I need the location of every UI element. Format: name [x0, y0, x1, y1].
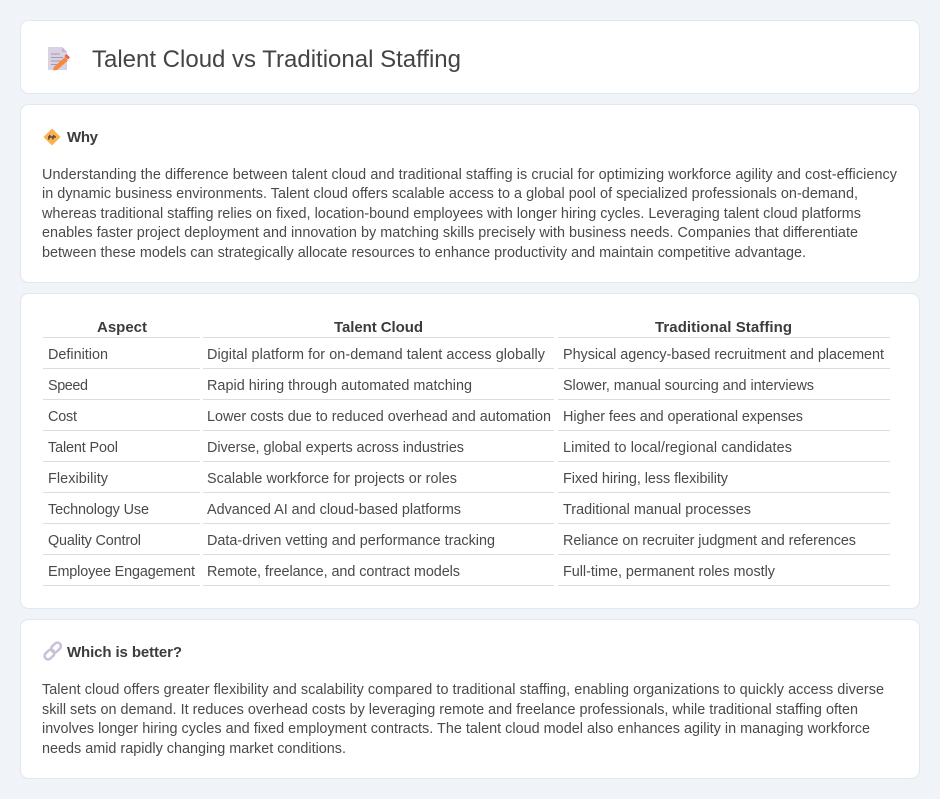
- text block: why paragraph: [41, 167, 898, 261]
- title: Talent Cloud vs Traditional Staffing: [92, 46, 461, 73]
- row: speed: Rapid hiring through automated matching: [207, 378, 472, 394]
- text block: why paragraph: Understanding the difference between talent cloud and traditional staffing is crucial for optimizing workforce agility and cost-efficiency: [42, 167, 898, 183]
- text block: which is better paragraph: needs amid rapidly changing market conditions.: [42, 741, 346, 757]
- text block: why paragraph: in dynamic business environments. Talent cloud offers scalable access to a global pool of specialized professionals on-demand,: [42, 186, 858, 202]
- row: cost: Higher fees and operational expenses: [563, 409, 803, 425]
- row: talent pool: [43, 440, 890, 462]
- text block: why paragraph: whereas traditional staffing relies on fixed, location-bound employees with longer hiring cycles. Leveraging talent cloud platforms: [41, 206, 861, 222]
- table header: Aspect: [97, 319, 147, 336]
- row: quality control: Quality Control: [48, 533, 141, 549]
- row: speed: [43, 378, 890, 400]
- text block: which is better paragraph: involves longer hiring cycles and fixed employment contracts. The talent cloud model also enhances agility in managing workforce: [42, 721, 870, 737]
- row: quality control: Data-driven vetting and performance tracking: [207, 533, 495, 549]
- icon: link: [43, 641, 62, 661]
- row: cost: Cost: [48, 409, 77, 425]
- row: technology use: [43, 502, 890, 524]
- panel: comparison table: [20, 294, 920, 608]
- row: flexibility: Scalable workforce for projects or roles: [207, 471, 457, 487]
- row: definition: Digital platform for on-demand talent access globally: [207, 347, 546, 363]
- row: talent pool: Talent Pool: [48, 440, 118, 456]
- row: talent pool: Diverse, global experts across industries: [207, 440, 464, 456]
- row: definition: Physical agency-based recruitment and placement: [563, 347, 884, 363]
- row: definition: Definition: [48, 347, 108, 363]
- row: employee engagement: Full-time, permanent roles mostly: [563, 564, 776, 580]
- text block: which is better paragraph: Talent cloud offers greater flexibility and scalability compared to traditional staffing, enabling organizations to quickly access diverse: [42, 682, 884, 698]
- panel: which is better: [20, 620, 920, 778]
- row: speed: Slower, manual sourcing and interviews: [563, 378, 814, 394]
- text block: why paragraph: enables faster project deployment and innovation by matching skills precisely with business needs. Companies that differentiate: [42, 225, 858, 241]
- table header: [43, 319, 890, 338]
- heading: why: Why: [67, 129, 99, 146]
- row: speed: Speed: [48, 378, 88, 394]
- text block: why paragraph: between these models can strategically allocate resources to enhance productivity and maintain competitive advantage.: [42, 245, 806, 261]
- row: cost: Lower costs due to reduced overhead and automation: [207, 409, 551, 425]
- table header: Talent Cloud: [334, 319, 423, 336]
- row: flexibility: [43, 471, 890, 492]
- row: employee engagement: Remote, freelance, and contract models: [207, 564, 460, 580]
- text block: which is better paragraph: skill sets on demand. It reduces overhead costs by leveraging remote and freelance professionals, while traditional staffing often: [42, 702, 858, 718]
- row: flexibility: Fixed hiring, less flexibility: [563, 471, 729, 487]
- row: talent pool: Limited to local/regional candidates: [563, 440, 792, 456]
- row: definition: [43, 347, 890, 368]
- row: quality control: Reliance on recruiter judgment and references: [563, 533, 856, 549]
- panel: title header: [20, 20, 920, 94]
- table header: Traditional Staffing: [655, 319, 792, 336]
- row: technology use: Advanced AI and cloud-based platforms: [207, 502, 461, 518]
- row: technology use: Traditional manual processes: [563, 502, 751, 518]
- row: quality control: [43, 533, 890, 554]
- row: flexibility: Flexibility: [48, 471, 109, 487]
- icon: caution diamond: [44, 128, 60, 146]
- panel: why: [20, 104, 920, 282]
- row: employee engagement: Employee Engagement: [48, 564, 195, 580]
- heading: which is better: Which is better?: [67, 644, 182, 661]
- row: employee engagement: [43, 564, 890, 586]
- text block: which is better paragraph: [42, 682, 884, 757]
- row: technology use: Technology Use: [48, 502, 149, 518]
- row: cost: [43, 409, 890, 430]
- icon: memo with pencil: [48, 47, 70, 70]
